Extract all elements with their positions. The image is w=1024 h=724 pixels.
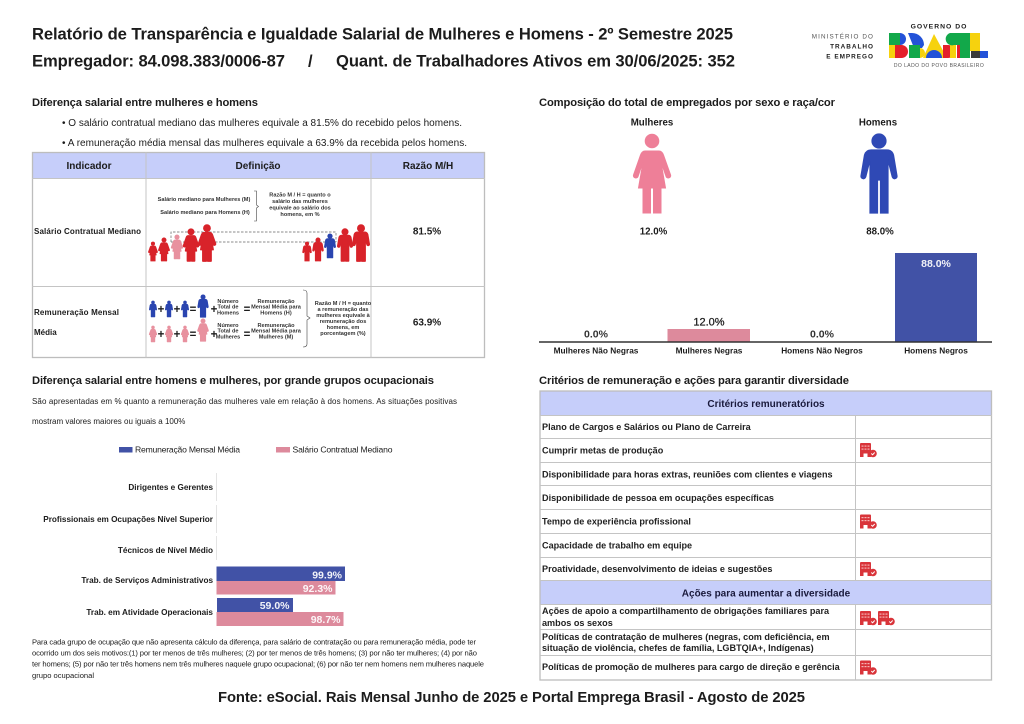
- panel: tabela indicadores: [32, 152, 485, 358]
- diagram: remuneração média: mulheres equivale à: [316, 313, 371, 319]
- diagram: remuneração média: Razão M / H = quanto: [315, 301, 372, 307]
- diagram: remuneração média: [149, 290, 372, 347]
- panel: tabela critérios: ambos os sexos: [542, 618, 613, 628]
- diagram: remuneração média: =: [244, 304, 251, 316]
- logo: Governo do Brasil: DO LADO DO POVO BRASILEIRO: [894, 63, 984, 69]
- diagram: remuneração média: Número: [217, 299, 239, 305]
- bar chart: grupos ocupacionais: 59.0%: [260, 600, 290, 612]
- text block: nota: grupo ocupacional: [32, 671, 94, 680]
- diagram: remuneração média: Homens (H): [260, 310, 292, 316]
- panel: tabela critérios: Proatividade, desenvolvimento de ideias e sugestões: [542, 564, 772, 574]
- panel: tabela critérios: situação de violência, chefes de família, LGBTQIA+, Indígenas): [542, 643, 814, 653]
- bar chart: raça/cor: Homens Não Negros: [781, 346, 863, 356]
- bar chart: grupos ocupacionais: [43, 473, 345, 626]
- diagram: remuneração média: remuneração dos: [320, 319, 366, 325]
- heading: grupos ocupacionais: Diferença salarial entre homens e mulheres, por grande grupos ocupacionais: [32, 375, 434, 387]
- text block: nota: ter homens; (5) por não ter três homens nem três mulheres naquele grupo ocupacional; (6) por não ter nem homens nem mulheres naquele: [32, 660, 484, 668]
- diagram: remuneração média: Mulheres (M): [259, 334, 293, 340]
- text block: bullets: • A remuneração média mensal das mulheres equivale a 63.9% da recebida pelos homens.: [62, 138, 467, 149]
- footer: fonte: Fonte: eSocial. Rais Mensal Junho de 2025 e Portal Emprega Brasil - Agosto de 2025: [218, 690, 805, 706]
- diagram: remuneração média: +: [211, 329, 218, 341]
- panel: tabela critérios: Cumprir metas de produção: [542, 446, 664, 456]
- bar chart: raça/cor: Homens Negros: [904, 346, 968, 356]
- bar chart: grupos ocupacionais: 99.9%: [312, 570, 343, 582]
- heading: critérios: Critérios de remuneração e ações para garantir diversidade: [539, 375, 849, 387]
- panel: tabela critérios: Critérios remuneratórios: [707, 399, 825, 410]
- diagram: remuneração média: homens, em: [327, 325, 359, 331]
- heading: diferença salarial: Diferença salarial entre mulheres e homens: [32, 97, 258, 109]
- panel: tabela critérios: Plano de Cargos e Salários ou Plano de Carreira: [542, 422, 752, 432]
- diagram: remuneração média: =: [244, 329, 251, 341]
- diagram: remuneração média: Mensal Média para: [251, 328, 302, 334]
- bar chart: raça/cor: 0.0%: [810, 328, 835, 340]
- bar chart: grupos ocupacionais: 98.7%: [311, 614, 341, 626]
- panel: tabela critérios: Disponibilidade de pessoa em ocupações específicas: [542, 493, 774, 503]
- logo: Governo do Brasil: GOVERNO DO: [911, 24, 967, 30]
- diagram: remuneração média: porcentagem (%): [320, 331, 366, 337]
- diagram: remuneração média: Mulheres: [216, 334, 240, 340]
- diagram: salário mediano: equivale ao salário dos: [269, 206, 331, 212]
- icon: mulheres: 12.0%: [640, 226, 668, 238]
- diagram: remuneração média: +: [174, 304, 181, 316]
- icon: homens: [859, 118, 897, 238]
- row: remuneração mensal média: [34, 308, 119, 337]
- text block: intro: São apresentadas em % quanto a remuneração das mulheres vale em relação à dos homens. As situações positivas: [32, 397, 457, 406]
- text block: nota: [32, 638, 484, 680]
- title: Empregador: 84.098.383/0006-87: [32, 52, 285, 70]
- bar chart: grupos ocupacionais: Trab. de Serviços Administrativos: [81, 576, 213, 585]
- value: 63.9%: 63.9%: [413, 318, 441, 328]
- bar chart: grupos ocupacionais: Dirigentes e Gerentes: [128, 483, 213, 492]
- bar chart: grupos ocupacionais: 92.3%: [303, 583, 333, 595]
- text block: intro: mostram valores maiores ou iguais a 100%: [32, 417, 185, 426]
- panel: tabela critérios: Políticas de contratação de mulheres (negras, com deficiência, em: [542, 632, 830, 642]
- bar chart: raça/cor: 88.0%: [921, 258, 952, 270]
- panel: tabela indicadores: Indicador: [66, 161, 112, 172]
- text block: nota: ocorrido um dos seis motivos:(1) por ter menos de três mulheres; (2) por ter menos de três homens; (3) por não ter mulheres; (4) por não: [32, 648, 477, 658]
- text block: bullets: • O salário contratual mediano das mulheres equivale a 81.5% do recebido pelos homens.: [62, 118, 462, 129]
- legend: [119, 444, 393, 454]
- logo: Ministério do Trabalho e Emprego: MINISTÉRIO DO: [812, 32, 874, 40]
- icon: mulheres: Mulheres: [631, 118, 673, 128]
- diagram: remuneração média: Total de: [217, 328, 239, 334]
- diagram: salário mediano: Salário mediano para Mulheres (M): [158, 197, 250, 203]
- diagram: remuneração média: Mensal Média para: [251, 304, 302, 310]
- panel: tabela indicadores: Definição: [235, 161, 281, 172]
- diagram: remuneração média: Remuneração: [258, 299, 295, 305]
- diagram: salário mediano: Salário mediano para Homens (H): [160, 210, 250, 216]
- diagram: remuneração média: +: [174, 329, 181, 341]
- logo: Ministério do Trabalho e Emprego: E EMPREGO: [826, 54, 874, 60]
- diagram: remuneração média: +: [158, 304, 165, 316]
- diagram: remuneração média: +: [158, 329, 165, 341]
- bar chart: raça/cor: 12.0%: [693, 316, 725, 328]
- diagram: remuneração média: a remuneração das: [318, 307, 368, 313]
- diagram: salário mediano: homens, em %: [280, 212, 320, 218]
- title: Relatório de Transparência e Igualdade Salarial de Mulheres e Homens - 2º Semestre 2025: [32, 24, 733, 44]
- diagram: remuneração média: Número: [217, 323, 239, 329]
- diagram: remuneração média: =: [190, 329, 197, 341]
- row: salário contratual mediano: Salário Contratual Mediano: [34, 227, 141, 236]
- bar chart: raça/cor: [539, 253, 992, 356]
- logo: Ministério do Trabalho e Emprego: [812, 32, 874, 60]
- diagram: remuneração média: Remuneração: [258, 323, 295, 329]
- bar chart: grupos ocupacionais: Técnicos de Nível Médio: [118, 546, 213, 555]
- panel: tabela critérios: Capacidade de trabalho em equipe: [542, 540, 692, 550]
- legend: Remuneração Mensal Média: [135, 444, 240, 454]
- row: remuneração mensal média: Remuneração Mensal: [34, 308, 119, 317]
- bar chart: grupos ocupacionais: Profissionais em Ocupações Nível Superior: [43, 515, 214, 524]
- diagram: remuneração média: +: [211, 304, 218, 316]
- value: 81.5%: 81.5%: [413, 226, 441, 238]
- diagram: remuneração média: =: [190, 304, 197, 316]
- panel: tabela critérios: Ações para aumentar a diversidade: [682, 588, 851, 600]
- icon: prédio com marca de verificação: [860, 443, 895, 675]
- icon: homens: Homens: [859, 118, 897, 128]
- bar chart: raça/cor: Mulheres Não Negras: [554, 346, 639, 356]
- title: Quant. de Trabalhadores Ativos em 30/06/2025: 352: [336, 52, 735, 70]
- diagram: remuneração média: Homens: [217, 310, 239, 316]
- bar chart: grupos ocupacionais: Trab. em Atividade Operacionais: [86, 608, 213, 617]
- panel: tabela critérios: [540, 391, 992, 680]
- icon: homens: 88.0%: [866, 226, 894, 238]
- text block: nota: Para cada grupo de ocupação que não apresenta cálculo da diferença, para salário de contratação ou para remuneração média, pode ter: [32, 638, 476, 646]
- panel: tabela indicadores: Razão M/H: [403, 161, 453, 172]
- text block: bullets: [62, 118, 467, 149]
- title: /: [308, 52, 313, 70]
- heading: composição: Composição do total de empregados por sexo e raça/cor: [539, 97, 836, 109]
- row: remuneração mensal média: Média: [34, 328, 57, 337]
- icon: mulheres: [631, 118, 673, 238]
- panel: tabela critérios: Tempo de experiência profissional: [542, 516, 691, 526]
- bar chart: raça/cor: Mulheres Negras: [676, 346, 743, 356]
- legend: Salário Contratual Mediano: [292, 444, 393, 454]
- panel: tabela critérios: Políticas de promoção de mulheres para cargo de direção e gerência: [542, 662, 841, 672]
- panel: tabela critérios: Ações de apoio a compartilhamento de obrigações familiares para: [542, 606, 830, 616]
- title: [32, 24, 735, 70]
- logo: Ministério do Trabalho e Emprego: TRABALHO: [830, 44, 874, 50]
- diagram: remuneração média: Total de: [217, 304, 239, 310]
- diagram: salário mediano: salário das mulheres: [272, 199, 328, 205]
- logo: Governo do Brasil: [889, 24, 988, 69]
- diagram: salário mediano: [149, 191, 369, 261]
- panel: tabela critérios: Disponibilidade para horas extras, reuniões com clientes e viagens: [542, 470, 833, 480]
- bar chart: raça/cor: 0.0%: [584, 328, 609, 340]
- diagram: salário mediano: Razão M / H = quanto o: [269, 192, 331, 198]
- text block: intro: [32, 397, 457, 426]
